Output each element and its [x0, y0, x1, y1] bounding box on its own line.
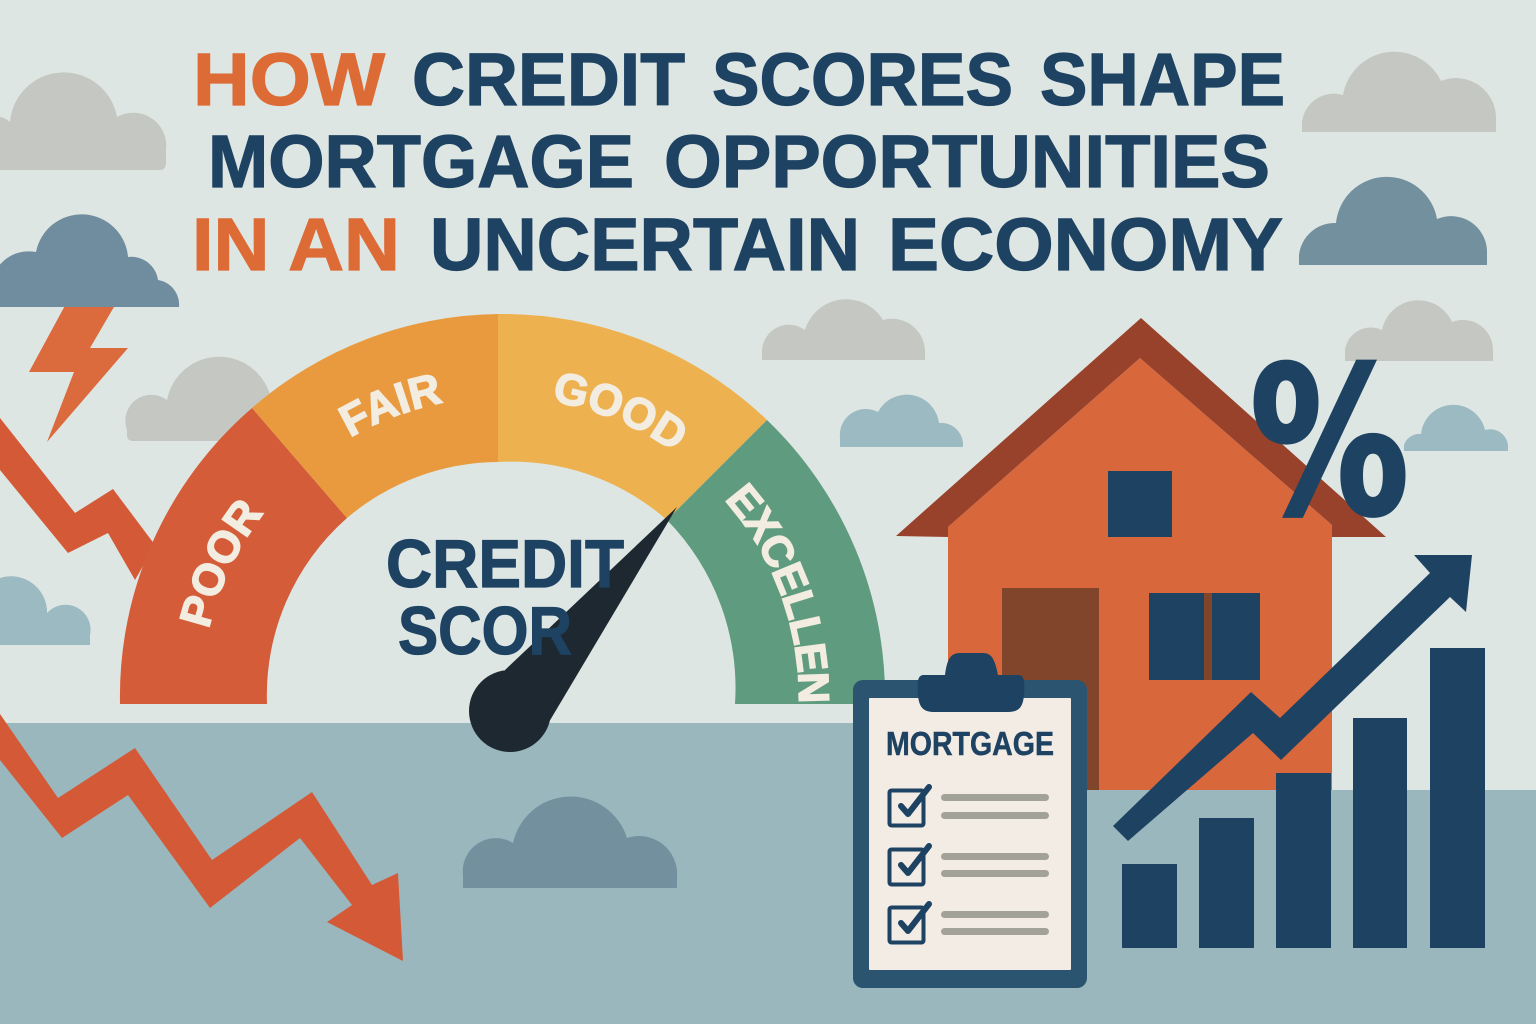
checklist row 1 — [890, 787, 1049, 826]
title: HOW — [193, 38, 385, 121]
house side window — [1149, 593, 1260, 680]
cloud: grey above house — [762, 299, 925, 360]
gauge label: fair: FAIR — [337, 374, 444, 438]
cloud: grey behind gauge — [125, 357, 290, 441]
cloud: storm cloud left — [0, 214, 179, 307]
clipboard clip — [918, 653, 1024, 712]
mortgage clipboard — [853, 653, 1087, 988]
title: UNCERTAIN — [430, 203, 860, 286]
cloud: slate right — [1299, 177, 1487, 265]
house door — [1002, 588, 1099, 790]
house — [896, 318, 1386, 790]
title — [192, 38, 1285, 286]
gauge label: excellent: EXCELLEN — [725, 482, 830, 702]
house roof — [896, 318, 1386, 537]
gauge segment: poor — [120, 408, 347, 704]
arrow: rising trend — [1113, 555, 1472, 841]
gauge caption: credit score — [386, 526, 624, 669]
cloud: light blue left — [0, 576, 91, 645]
house body — [948, 358, 1332, 790]
title: OPPORTUNITIES — [664, 120, 1270, 203]
icon: lightning bolt — [29, 300, 128, 442]
checklist row 2 — [890, 846, 1049, 884]
gauge label: poor: POOR — [179, 500, 264, 628]
clipboard board — [853, 680, 1087, 988]
clipboard paper — [869, 698, 1071, 970]
cloud: light blue centre — [840, 395, 963, 447]
gauge caption: credit score: SCOR — [398, 593, 572, 669]
cloud: slate on ground — [463, 797, 677, 888]
ground — [0, 723, 1536, 1024]
title: ECONOMY — [888, 203, 1283, 286]
title: CREDIT — [412, 38, 685, 121]
arrow: lower falling trend — [0, 714, 403, 961]
gauge needle — [469, 507, 677, 752]
checklist row 3 — [890, 904, 1049, 942]
gauge segment: excellent — [667, 420, 885, 704]
cloud: light blue right — [1404, 405, 1508, 451]
house attic window — [1108, 471, 1172, 537]
clipboard heading: MORTGAGE — [886, 725, 1054, 762]
gauge caption: credit score: CREDIT — [386, 526, 624, 602]
percent sign: % — [1250, 325, 1409, 562]
title: SCORES — [712, 38, 1013, 121]
gauge segment: good — [498, 314, 767, 520]
title: MORTGAGE — [208, 120, 634, 203]
cloud: grey right of roof — [1345, 300, 1493, 361]
gauge segment: fair — [252, 314, 498, 518]
bar chart — [1122, 648, 1485, 948]
cloud: grey top right — [1302, 52, 1496, 132]
gauge label: good: GOOD — [555, 373, 686, 446]
cloud: grey top left — [0, 72, 166, 170]
arrow: upper falling trend — [0, 418, 155, 580]
title: SHAPE — [1040, 38, 1285, 121]
credit score gauge — [120, 314, 885, 704]
title: IN AN — [192, 203, 400, 286]
